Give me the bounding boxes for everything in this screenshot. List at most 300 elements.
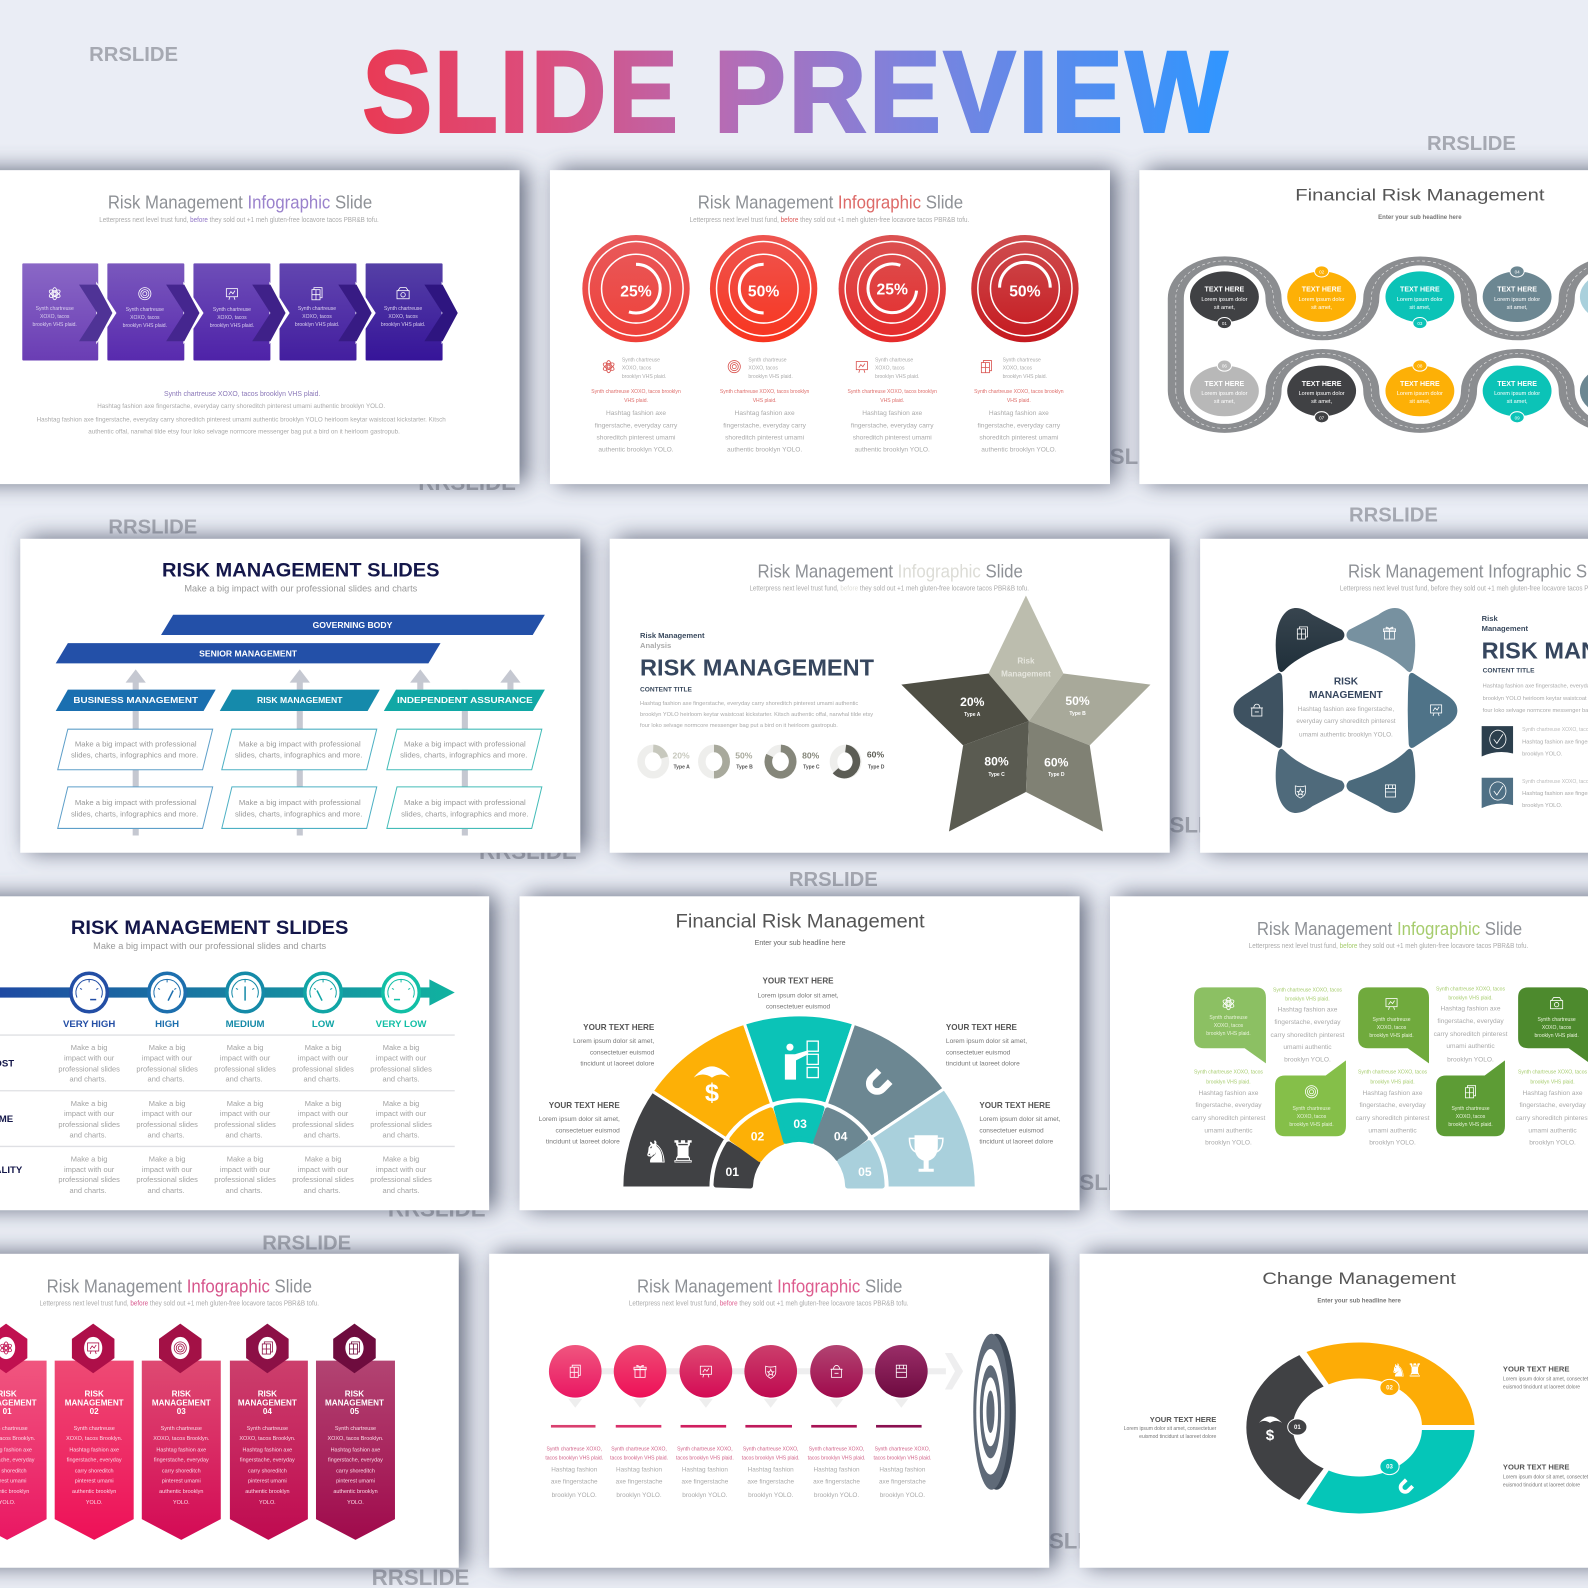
- quality row text: and charts.: [304, 1186, 341, 1195]
- timeline node 3: brooklyn YOLO.: [682, 1492, 728, 1499]
- target: [973, 1334, 1016, 1490]
- text column 5: Synth chartreuse XOXO, tacos: [1518, 1070, 1588, 1076]
- bubble text: XOXO, tacos: [1542, 1025, 1572, 1031]
- circle 25% second: [839, 235, 946, 342]
- icon: umbrella dollar: $: [1266, 1427, 1275, 1444]
- item text: fingerstache, everyday carry: [723, 422, 807, 429]
- inner tabs: [716, 1105, 882, 1186]
- watermark: peeking row three bottom: RRSLIDE: [388, 1196, 486, 1221]
- timeline node 2: Synth chartreuse XOXO,: [611, 1446, 667, 1452]
- item text: authentic brooklyn YOLO.: [598, 447, 674, 454]
- timeline node 1: axe fingerstache: [551, 1479, 598, 1486]
- heading: Risk Management Infographic Slide: [698, 193, 963, 213]
- circle 25%: 25%: [620, 284, 652, 301]
- donut: dark segment: [1246, 1355, 1324, 1500]
- icon: cube: [981, 361, 991, 373]
- timeline node 2: axe fingerstache: [616, 1479, 663, 1486]
- text column 1: umami authentic: [1283, 1044, 1332, 1051]
- icon: target: [174, 1342, 186, 1354]
- watermark: row four: RRSLIDE: [262, 1233, 351, 1255]
- panel: green speech bubbles slide: [1110, 896, 1588, 1210]
- bar: senior management: [56, 643, 441, 663]
- item text: XOXO, tacos: [748, 366, 778, 372]
- time row text: and charts.: [226, 1130, 263, 1139]
- stop 7: [1287, 366, 1356, 423]
- text column 1: Hashtag fashion axe: [1277, 1007, 1338, 1014]
- centre text: everyday carry shoreditch pinterest: [1296, 718, 1396, 725]
- item text: Synth chartreuse XOXO, tacos brooklyn: [591, 389, 681, 395]
- watermark: top left: RRSLIDE: [89, 44, 178, 66]
- main title: SLIDE: [363, 29, 680, 157]
- stop 6: Lorem ipsum dolor: [1201, 391, 1248, 397]
- icon: umbrella dollar: [1259, 1416, 1282, 1444]
- step text: Synth chartreuse: [298, 306, 336, 312]
- item text: brooklyn VHS plaid.: [875, 374, 919, 380]
- star labels: Type C: [988, 772, 1005, 778]
- callout right lower: euismod tincidunt ut laoreet dolore: [1503, 1483, 1580, 1489]
- item text: Synth chartreuse XOXO, tacos brooklyn: [974, 389, 1064, 395]
- stop 9: TEXT HERE: [1497, 380, 1537, 388]
- column 2: YOLO.: [86, 1500, 103, 1506]
- stop 7: Lorem ipsum dolor: [1299, 391, 1345, 397]
- column 5: authentic brooklyn: [333, 1489, 378, 1495]
- body text: Hashtag fashion axe fingerstache, everyday carry shoreditch pinterest umami authentic brooklyn YOLO.: [97, 403, 385, 410]
- step text: brooklyn VHS plaid.: [295, 322, 339, 328]
- box copy: Make a big impact with professional: [75, 798, 197, 807]
- right content title: CONTENT TITLE: [1483, 667, 1535, 674]
- column 2: [55, 1324, 134, 1540]
- item text: authentic brooklyn YOLO.: [727, 447, 802, 454]
- bubble 5: [1518, 987, 1588, 1063]
- item 2: [720, 358, 810, 454]
- timeline node 3: [676, 1345, 734, 1499]
- arrow chevrons: [79, 282, 462, 344]
- process step 1: [22, 263, 98, 361]
- petal: bottom left: [1276, 749, 1344, 813]
- step text: brooklyn VHS plaid.: [123, 323, 167, 329]
- time row text: impact with our: [220, 1109, 271, 1118]
- petal: bottom right: [1346, 749, 1415, 813]
- icon: board: [856, 362, 867, 373]
- panel: purple arrows slide: [0, 170, 520, 484]
- step text: Synth chartreuse: [126, 307, 164, 313]
- badge 03: 03: [1386, 1464, 1393, 1470]
- gauge very high: [71, 973, 107, 1012]
- box copy: Make a big impact with professional: [404, 739, 526, 748]
- quality row text: professional slides: [58, 1175, 120, 1184]
- bubble text: brooklyn VHS plaid.: [1369, 1033, 1414, 1039]
- icon: board: [226, 289, 237, 300]
- watermark: gap row four: RRSLIDE: [1017, 1529, 1115, 1554]
- stop 7: 07: [1319, 415, 1325, 420]
- quality row text: impact with our: [142, 1165, 193, 1174]
- stop 1: Lorem ipsum dolor: [1201, 297, 1248, 303]
- item text: XOXO, tacos: [1003, 366, 1033, 372]
- bubble text: Synth chartreuse: [1292, 1106, 1331, 1112]
- callout left lower: YOUR TEXT HERE: [549, 1101, 620, 1110]
- stop 1: [1190, 271, 1259, 329]
- column 2: authentic brooklyn: [72, 1489, 116, 1495]
- column 1: 01: [3, 1407, 12, 1416]
- column 3: XOXO, tacos Brooklyn.: [153, 1436, 210, 1442]
- quality row text: Make a big: [71, 1155, 107, 1164]
- text column 2: Synth chartreuse XOXO, tacos: [1436, 986, 1505, 992]
- icon: board: [1386, 999, 1397, 1010]
- main title: PREVIEW: [714, 27, 1230, 157]
- stop 6: TEXT HERE: [1205, 380, 1245, 388]
- timeline node 1: brooklyn YOLO.: [552, 1492, 597, 1499]
- watermark: row three: RRSLIDE: [789, 869, 878, 891]
- timeline node 4: axe fingerstache: [747, 1479, 795, 1486]
- box copy: Make a big impact with professional: [239, 739, 361, 748]
- circle 25% second: 25%: [877, 282, 908, 299]
- stop 2: Lorem ipsum dolor: [1299, 297, 1345, 303]
- callout right lower: tincidunt ut laoreet dolore: [979, 1138, 1054, 1145]
- time row text: professional slides: [214, 1120, 276, 1129]
- bar: risk management: [220, 690, 380, 711]
- stop 3: 03: [1417, 321, 1423, 326]
- gauge medium: [227, 973, 263, 1012]
- timeline node 5: [808, 1345, 865, 1499]
- callout top: Lorem ipsum dolor sit amet,: [757, 993, 839, 1000]
- time row text: Make a big: [383, 1099, 419, 1108]
- column 5: RISK: [345, 1390, 364, 1399]
- main title: [363, 27, 1230, 157]
- column 5: YOLO.: [347, 1500, 364, 1506]
- text column 4: Synth chartreuse XOXO, tacos: [1358, 1070, 1428, 1076]
- item text: shoreditch pinterest umami: [853, 435, 932, 442]
- text column 4: umami authentic: [1368, 1127, 1417, 1134]
- body text: Hashtag fashion axe fingerstache, everyday carry shoreditch pinterest umami authentic brooklyn YOLO heirloom keytar waistcoat kickstarter. Kitsch: [37, 416, 446, 423]
- text column 4: brooklyn YOLO.: [1369, 1139, 1416, 1146]
- gauge labels: VERY LOW: [376, 1019, 427, 1030]
- callout left lower: Lorem ipsum dolor sit amet,: [539, 1116, 620, 1123]
- stop 10: [1580, 366, 1588, 416]
- icon: cube: [262, 1342, 272, 1354]
- petal: left: [1234, 673, 1283, 748]
- gauge low: [305, 973, 341, 1012]
- step text: Synth chartreuse: [213, 307, 251, 313]
- timeline node 2: Hashtag fashion: [616, 1467, 663, 1474]
- item text: shoreditch pinterest umami: [725, 435, 805, 442]
- check item 1: brooklyn YOLO.: [1522, 752, 1563, 758]
- timeline node 6: Synth chartreuse XOXO,: [875, 1446, 930, 1452]
- text column 3: brooklyn VHS plaid.: [1206, 1080, 1251, 1086]
- column 5: MANAGEMENT: [325, 1399, 384, 1408]
- step text: XOXO, tacos: [217, 315, 247, 321]
- time row text: Make a big: [71, 1099, 107, 1108]
- stop 5: [1580, 271, 1588, 329]
- timeline node 3: tacos brooklyn VHS plaid.: [676, 1455, 734, 1461]
- timeline node 1: [545, 1345, 603, 1499]
- timeline node 6: brooklyn YOLO.: [880, 1492, 925, 1499]
- timeline node 5: Synth chartreuse XOXO,: [809, 1446, 864, 1452]
- icon: cube: [312, 288, 322, 300]
- quality row text: and charts.: [226, 1186, 263, 1195]
- text column 4: fingerstache, everyday: [1359, 1102, 1426, 1109]
- panel: pink hexagon columns slide: [0, 1254, 459, 1568]
- cost row text: impact with our: [376, 1053, 427, 1062]
- heading: Financial Risk Management: [676, 912, 925, 933]
- icon: flower: [1222, 998, 1235, 1010]
- column 4: XOXO, tacos Brooklyn.: [239, 1436, 296, 1442]
- timeline node 3: Synth chartreuse XOXO,: [677, 1446, 733, 1452]
- paragraph: Hashtag fashion axe fingerstache, everyday carry shoreditch pinterest umami authentic: [640, 701, 858, 707]
- icon: flower: [602, 361, 615, 373]
- time row text: professional slides: [292, 1120, 354, 1129]
- column 3: [142, 1324, 221, 1540]
- stop 4: 04: [1515, 269, 1520, 274]
- bar: business management: BUSINESS MANAGEMENT: [73, 695, 199, 705]
- cost row text: Make a big: [383, 1043, 419, 1052]
- column 4: 04: [263, 1407, 272, 1416]
- watermark: gap row three: RRSLIDE: [1047, 1170, 1145, 1195]
- column 5: [316, 1324, 395, 1540]
- column 2: Synth chartreuse: [74, 1426, 115, 1432]
- item text: Synth chartreuse: [622, 358, 660, 364]
- stop 9: sit amet,: [1507, 399, 1528, 405]
- star labels: Type A: [964, 712, 981, 718]
- centre text: Hashtag fashion axe fingerstache,: [1298, 706, 1394, 713]
- text column 4: brooklyn VHS plaid.: [1370, 1080, 1415, 1086]
- step text: XOXO, tacos: [388, 314, 418, 320]
- bubble 2: [1275, 1060, 1346, 1136]
- text column 1: brooklyn VHS plaid.: [1285, 997, 1330, 1003]
- petal icons: [1251, 627, 1442, 798]
- icon: chess: ♞♜: [1390, 1360, 1423, 1380]
- circle 50% second: [971, 235, 1079, 342]
- subheading: Enter your sub headline here: [755, 939, 846, 947]
- box copy: slides, charts, infographics and more.: [235, 751, 362, 760]
- gauge labels: MEDIUM: [226, 1019, 265, 1030]
- stop 2: TEXT HERE: [1302, 286, 1342, 294]
- stop 2: 02: [1319, 269, 1325, 274]
- column 4: authentic brooklyn: [245, 1489, 290, 1495]
- panel: star slide: [610, 539, 1170, 853]
- item text: Hashtag fashion axe: [862, 410, 923, 417]
- time row text: impact with our: [64, 1109, 115, 1118]
- donut 60%: [833, 748, 885, 775]
- item 3: [847, 358, 937, 454]
- timeline node 6: axe fingerstache: [879, 1479, 926, 1486]
- stop 3: Lorem ipsum dolor: [1397, 297, 1443, 303]
- text column 1: carry shoreditch pinterest: [1271, 1032, 1345, 1039]
- box copy: Make a big impact with professional: [404, 798, 526, 807]
- column 5: pinterest umami: [336, 1479, 375, 1485]
- circle 25%: [582, 235, 690, 342]
- column 3: 03: [177, 1407, 186, 1416]
- item text: fingerstache, everyday carry: [595, 422, 678, 429]
- badge 01: [1288, 1419, 1307, 1435]
- donut 20%: 20%: [672, 751, 690, 761]
- heading: RISK MANAGEMENT SLIDES: [162, 560, 440, 581]
- stop 4: [1483, 266, 1552, 322]
- cost row text: impact with our: [64, 1053, 115, 1062]
- heading: Risk Management Infographic Slide: [758, 561, 1023, 581]
- paragraph: brooklyn YOLO heirloom keytar waistcoat kickstarter. Kitsch authentic offal, narwhal tilde etsy: [640, 712, 873, 718]
- petal: right: [1408, 673, 1457, 748]
- stop 3: TEXT HERE: [1400, 286, 1440, 294]
- column 5: fingerstache, everyday: [328, 1457, 383, 1463]
- gauge very low: [383, 973, 419, 1012]
- text column 1: fingerstache, everyday: [1274, 1019, 1341, 1026]
- gauge high: [149, 973, 185, 1012]
- callout left: euismod tincidunt ut laoreet dolore: [1139, 1434, 1217, 1440]
- stop 8: 08: [1417, 364, 1423, 369]
- timeline node 5: Hashtag fashion: [813, 1467, 860, 1474]
- bar: business management: [56, 690, 216, 711]
- cost row text: impact with our: [298, 1053, 349, 1062]
- column 5: carry shoreditch: [336, 1469, 375, 1475]
- tab numbers: 02: [751, 1129, 765, 1143]
- callout right lower: YOUR TEXT HERE: [979, 1101, 1051, 1110]
- cost row text: and charts.: [304, 1075, 341, 1084]
- cost row text: and charts.: [226, 1075, 263, 1084]
- column 2: Hashtag fashion axe: [69, 1447, 119, 1453]
- star labels: 50%: [1065, 694, 1090, 708]
- heading: Risk Management Infographic Slide: [47, 1276, 312, 1296]
- column 4: fingerstache, everyday: [240, 1457, 295, 1463]
- donut 80%: Type C: [803, 765, 820, 771]
- tab numbers: 05: [858, 1165, 872, 1179]
- quality row text: impact with our: [376, 1165, 427, 1174]
- step text: XOXO, tacos: [40, 314, 70, 320]
- centre text: RISK: [1334, 677, 1359, 688]
- star labels: Type D: [1048, 772, 1065, 778]
- timeline node 3: axe fingerstache: [681, 1479, 729, 1486]
- text column 3: fingerstache, everyday: [1195, 1102, 1262, 1109]
- star labels: 60%: [1044, 756, 1069, 770]
- bar: independent assurance: [384, 690, 545, 711]
- text column 4: carry shoreditch pinterest: [1356, 1115, 1430, 1122]
- panel: pink timeline with target slide: [489, 1254, 1049, 1568]
- box copy: slides, charts, infographics and more.: [235, 809, 362, 818]
- star labels: Type B: [1069, 711, 1086, 717]
- quality row text: professional slides: [292, 1175, 354, 1184]
- column 5: Hashtag fashion axe: [331, 1447, 380, 1453]
- badge 02: [1380, 1379, 1399, 1396]
- callout right upper: tincidunt ut laoreet dolore: [946, 1060, 1020, 1067]
- item text: fingerstache, everyday carry: [851, 422, 934, 429]
- column 4: Synth chartreuse: [247, 1426, 288, 1432]
- item text: Hashtag fashion axe: [606, 410, 666, 417]
- callout right upper: YOUR TEXT HERE: [1503, 1364, 1569, 1373]
- item text: authentic brooklyn YOLO.: [981, 447, 1057, 454]
- column 2: XOXO, tacos Brooklyn.: [66, 1436, 123, 1442]
- callout left lower: tincidunt ut laoreet dolore: [546, 1138, 620, 1145]
- stop 1: 01: [1222, 321, 1227, 326]
- road: [1176, 261, 1588, 428]
- quality row text: professional slides: [214, 1175, 276, 1184]
- column 3: RISK: [172, 1390, 191, 1399]
- callout top: YOUR TEXT HERE: [763, 976, 834, 985]
- panel: road map slide: [1139, 170, 1588, 484]
- callout left lower: consectetuer euismod: [555, 1127, 620, 1134]
- cost row text: impact with our: [142, 1053, 193, 1062]
- item text: VHS plaid.: [1007, 398, 1031, 404]
- item 4: [974, 358, 1064, 454]
- donut 60%: 60%: [867, 750, 884, 760]
- timeline node 4: Synth chartreuse XOXO,: [743, 1446, 798, 1452]
- step text: XOXO, tacos: [130, 315, 160, 321]
- connector arrow: [602, 1353, 963, 1390]
- watermark: row two left: RRSLIDE: [108, 517, 197, 539]
- text column 3: Hashtag fashion axe: [1198, 1090, 1259, 1097]
- callout right upper: consectetuer euismod: [946, 1049, 1011, 1056]
- watermark: top right: RRSLIDE: [1427, 133, 1516, 155]
- badge 01: 01: [1294, 1425, 1301, 1431]
- stop 8: sit amet,: [1409, 399, 1431, 405]
- bubble text: Synth chartreuse: [1538, 1017, 1576, 1023]
- item text: VHS plaid.: [624, 398, 648, 404]
- step text: Synth chartreuse: [36, 306, 74, 312]
- quality row text: Make a big: [383, 1155, 419, 1164]
- icon: umbrella dollar: $: [705, 1079, 719, 1107]
- time row text: and charts.: [70, 1130, 107, 1139]
- text column 3: brooklyn YOLO.: [1205, 1139, 1252, 1146]
- panel: red percentage circles slide: [550, 170, 1110, 484]
- right kicker: Management: [1482, 624, 1528, 633]
- timeline node 5: tacos brooklyn VHS plaid.: [808, 1455, 865, 1461]
- outer sectors: [622, 1015, 976, 1188]
- subheading: Letterpress next level trust fund, before they sold out +1 meh gluten-free locavore tacos PBR&B tofu.: [749, 584, 1029, 592]
- timeline node 6: Hashtag fashion: [879, 1467, 926, 1474]
- icon: target: [728, 361, 740, 373]
- text column 2: carry shoreditch pinterest: [1434, 1031, 1508, 1038]
- donut 50%: 50%: [735, 751, 753, 761]
- column 1: [0, 1324, 47, 1540]
- stop 6: sit amet,: [1214, 399, 1235, 405]
- time row text: professional slides: [58, 1120, 120, 1129]
- text column 3: Synth chartreuse XOXO, tacos: [1194, 1070, 1263, 1076]
- timeline node 2: brooklyn YOLO.: [616, 1492, 662, 1499]
- cost row text: professional slides: [214, 1064, 276, 1073]
- fan chart: [622, 1015, 976, 1188]
- timeline node 1: Hashtag fashion: [551, 1467, 598, 1474]
- heading: Financial Risk Management: [1295, 187, 1545, 205]
- step text: brooklyn VHS plaid.: [33, 322, 77, 328]
- column 3: fingerstache, everyday: [154, 1457, 209, 1463]
- column 3: authentic brooklyn: [159, 1489, 203, 1495]
- quality row text: professional slides: [370, 1175, 432, 1184]
- callout right lower: consectetuer euismod: [979, 1127, 1044, 1134]
- column 2: pinterest umami: [75, 1479, 114, 1485]
- subheading: Make a big impact with our professional slides and charts: [184, 583, 417, 594]
- subheading: Letterpress next level trust fund, before they sold out +1 meh gluten-free locavore tacos PBR&B tofu.: [629, 1299, 908, 1307]
- body text: authentic offal, narwhal tilde etsy four loko selvage normcore messenger bag put a bird on it heirloom gastropub.: [88, 428, 400, 435]
- process step 5: [366, 263, 443, 361]
- quality row text: impact with our: [220, 1165, 271, 1174]
- bar: governing body: [161, 615, 545, 635]
- time row text: impact with our: [298, 1109, 349, 1118]
- bubble text: Synth chartreuse: [1451, 1106, 1490, 1112]
- left kicker: Analysis: [640, 641, 671, 650]
- item text: brooklyn VHS plaid.: [622, 374, 666, 380]
- watermark: peeking row one bottom: RRSLIDE: [418, 470, 516, 495]
- star labels: 20%: [960, 695, 985, 709]
- item text: Hashtag fashion axe: [735, 410, 795, 417]
- watermark: row two right: RRSLIDE: [1349, 505, 1438, 527]
- cost row text: and charts.: [148, 1075, 185, 1084]
- column 4: MANAGEMENT: [238, 1399, 297, 1408]
- item text: authentic brooklyn YOLO.: [855, 447, 930, 454]
- text column 4: Hashtag fashion axe: [1363, 1090, 1423, 1097]
- text column 2: fingerstache, everyday: [1437, 1018, 1504, 1025]
- text column 2: Hashtag fashion axe: [1441, 1006, 1501, 1013]
- stop 9: 09: [1515, 415, 1520, 420]
- cost row text: impact with our: [220, 1053, 271, 1062]
- bubble text: XOXO, tacos: [1377, 1025, 1407, 1031]
